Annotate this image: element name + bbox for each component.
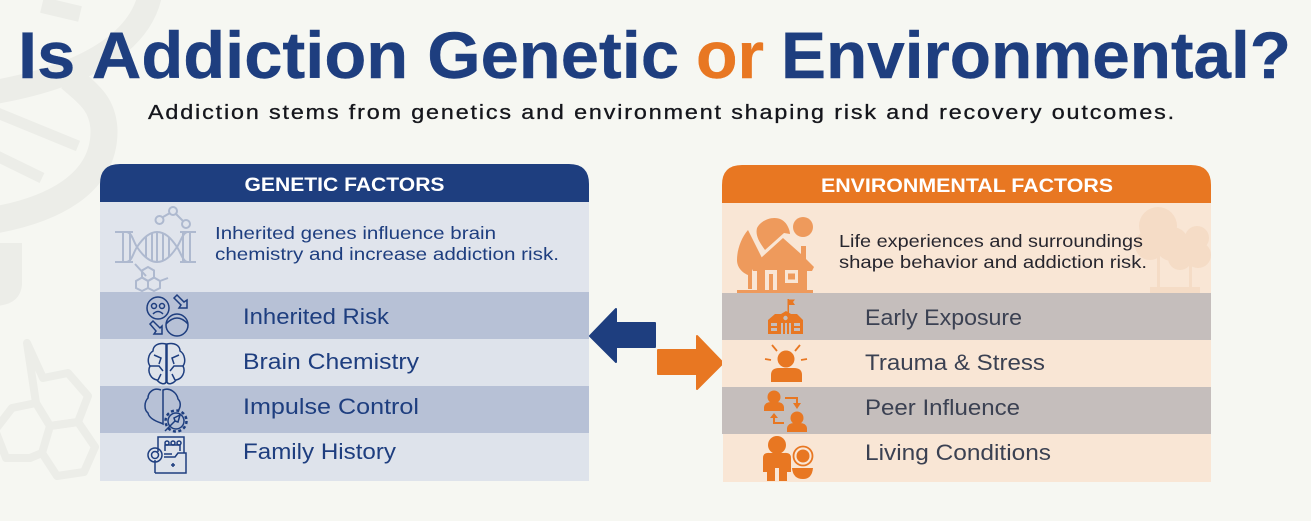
genetic panel header: GENETIC FACTORS [244, 175, 444, 196]
label: Brain Chemistry [243, 349, 419, 374]
icon: faded trees [1135, 207, 1211, 293]
arrow: pointing to environmental panel [658, 336, 723, 389]
environmental intro text: shape behavior and addiction risk. [839, 252, 1147, 272]
icon: person with money [763, 436, 813, 481]
environmental panel header [722, 165, 1211, 203]
icon: brain [148, 343, 185, 384]
environmental panel header: ENVIRONMENTAL FACTORS [821, 176, 1113, 197]
label: Peer Influence [865, 395, 1020, 420]
background decoration: hexagons [0, 343, 95, 476]
genetic intro text [215, 223, 559, 264]
title [18, 18, 1291, 92]
genetic intro row [100, 202, 589, 292]
icon: brain with gear [145, 389, 186, 432]
genetic panel header [100, 164, 589, 202]
title: Is Addiction Genetic [18, 18, 679, 92]
genetic intro text: Inherited genes influence brain [215, 223, 496, 243]
row: trauma and stress [722, 340, 1211, 387]
arrow: pointing to genetic panel [590, 309, 655, 362]
subtitle: Addiction stems from genetics and environment shaping risk and recovery outcomes. [148, 102, 1176, 124]
title: or [696, 18, 764, 92]
environmental intro text: Life experiences and surroundings [839, 231, 1143, 251]
icon: family records [148, 437, 186, 473]
icon: house and trees [737, 217, 814, 293]
label: Family History [243, 439, 396, 464]
row: impulse control [100, 386, 589, 433]
label: Living Conditions [865, 440, 1051, 465]
row: peer influence [722, 387, 1211, 434]
background decoration: DNA helix [0, 0, 150, 306]
label: Inherited Risk [243, 304, 390, 329]
row: brain chemistry [100, 339, 589, 386]
row: inherited risk [100, 292, 589, 339]
icon: DNA and molecules [115, 207, 196, 291]
row: family history [100, 433, 589, 481]
panel: genetic factors [100, 164, 589, 481]
panel: environmental factors [722, 165, 1211, 482]
row: early exposure [722, 293, 1211, 340]
label: Impulse Control [243, 394, 419, 419]
icon: stressed person [765, 345, 807, 382]
label: Trauma & Stress [865, 350, 1045, 375]
environmental intro text [839, 231, 1147, 272]
row: living conditions [723, 434, 1211, 482]
genetic intro text: chemistry and increase addiction risk. [215, 244, 559, 264]
environmental intro row [722, 203, 1211, 293]
label: Early Exposure [865, 305, 1022, 330]
icon: peers exchanging [764, 390, 807, 432]
icon: school [768, 299, 803, 334]
title: Environmental? [781, 18, 1291, 92]
icon: inherited risk [147, 295, 188, 336]
